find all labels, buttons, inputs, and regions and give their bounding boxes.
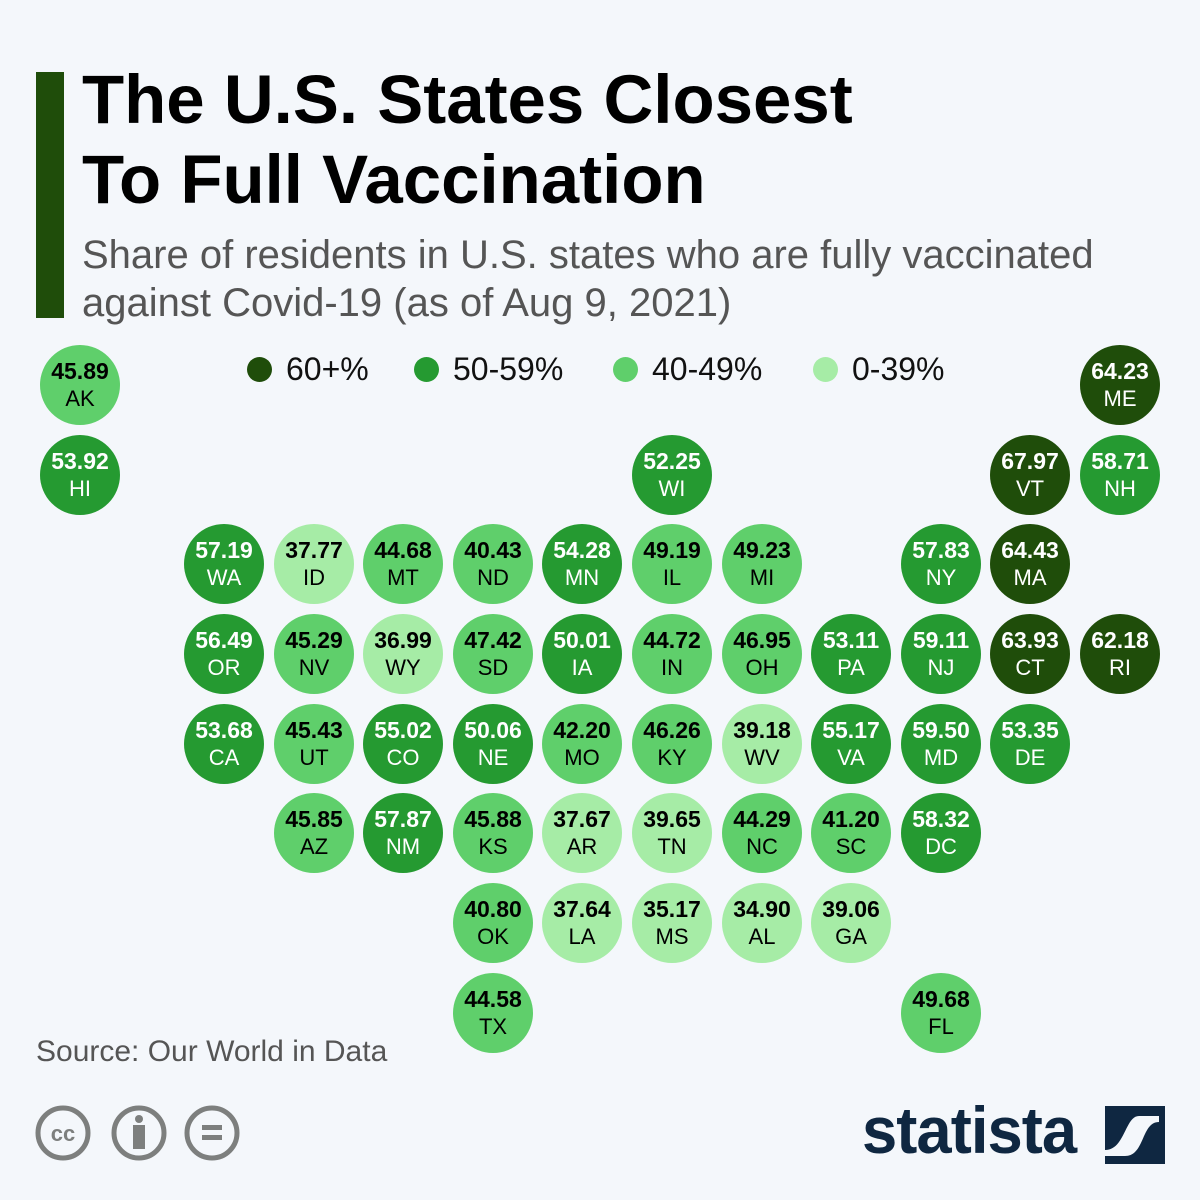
tile map of states: 45.29 bbox=[285, 627, 343, 653]
tile map of states: 59.11 bbox=[913, 627, 969, 653]
tile map of states: 45.88 bbox=[464, 806, 522, 832]
tile map of states: RI bbox=[1109, 655, 1131, 680]
tile map of states: OK bbox=[477, 924, 509, 949]
tile map of states: AL bbox=[749, 924, 775, 949]
tile map of states: 44.29 bbox=[733, 806, 791, 832]
tile map of states: ND bbox=[477, 565, 509, 590]
tile map of states: AK bbox=[65, 386, 95, 411]
tile map of states: NC bbox=[746, 834, 778, 859]
tile map of states: 39.65 bbox=[643, 806, 701, 832]
tile map of states: 37.77 bbox=[285, 537, 343, 563]
tile map of states: WI bbox=[659, 476, 685, 501]
tile map of states: NV bbox=[299, 655, 329, 680]
tile map of states: 58.71 bbox=[1091, 448, 1149, 474]
tile map of states: 67.97 bbox=[1001, 448, 1059, 474]
tile map of states: OR bbox=[208, 655, 240, 680]
tile map of states: 53.92 bbox=[51, 448, 109, 474]
tile map of states: ME bbox=[1104, 386, 1136, 411]
tile map of states: PA bbox=[837, 655, 865, 680]
tile map of states: NJ bbox=[928, 655, 954, 680]
tile map of states: 37.67 bbox=[553, 806, 611, 832]
tile map of states: MS bbox=[656, 924, 688, 949]
license icons bbox=[36, 1106, 240, 1160]
tile map of states: 44.58 bbox=[464, 986, 522, 1012]
tile map of states: MI bbox=[750, 565, 774, 590]
tile map of states: 53.11 bbox=[823, 627, 879, 653]
tile map of states: 63.93 bbox=[1001, 627, 1059, 653]
tile map of states: 55.17 bbox=[822, 717, 880, 743]
tile map of states: 57.83 bbox=[912, 537, 970, 563]
tile map of states: 40.80 bbox=[464, 896, 522, 922]
tile map of states: HI bbox=[69, 476, 91, 501]
tile map of states: MT bbox=[387, 565, 419, 590]
tile map of states: FL bbox=[928, 1014, 954, 1039]
tile map of states: VA bbox=[837, 745, 865, 770]
tile map of states: 49.68 bbox=[912, 986, 970, 1012]
tile map of states: 45.85 bbox=[285, 806, 343, 832]
tile map of states: NM bbox=[386, 834, 420, 859]
tile map of states: 62.18 bbox=[1091, 627, 1149, 653]
legend: 40-49% bbox=[652, 351, 762, 387]
tile map of states bbox=[40, 345, 1160, 1053]
tile map of states: 39.06 bbox=[822, 896, 880, 922]
legend bbox=[247, 351, 944, 387]
tile map of states: 37.64 bbox=[553, 896, 611, 922]
tile map of states: 54.28 bbox=[553, 537, 611, 563]
title accent bar bbox=[36, 72, 64, 318]
tile map of states: TN bbox=[657, 834, 687, 859]
tile map of states: NH bbox=[1104, 476, 1136, 501]
tile map of states: 57.87 bbox=[374, 806, 432, 832]
tile map of states: 64.23 bbox=[1091, 358, 1149, 384]
tile map of states: 55.02 bbox=[374, 717, 432, 743]
tile map of states: MD bbox=[924, 745, 958, 770]
tile map of states: WA bbox=[207, 565, 241, 590]
tile map of states: ID bbox=[303, 565, 325, 590]
tile map of states: 46.26 bbox=[643, 717, 701, 743]
tile map of states: MO bbox=[564, 745, 600, 770]
tile map of states: CO bbox=[386, 745, 420, 770]
tile map of states: CA bbox=[209, 745, 239, 770]
tile map of states: 47.42 bbox=[464, 627, 522, 653]
tile map of states: GA bbox=[835, 924, 867, 949]
subtitle: Share of residents in U.S. states who are fully vaccinated bbox=[82, 233, 1094, 277]
tile map of states: NE bbox=[478, 745, 508, 770]
tile map of states: 52.25 bbox=[643, 448, 701, 474]
tile map of states: IN bbox=[661, 655, 683, 680]
subtitle bbox=[82, 233, 1094, 325]
tile map of states: UT bbox=[299, 745, 329, 770]
tile map of states: WV bbox=[744, 745, 780, 770]
tile map of states: 44.72 bbox=[643, 627, 701, 653]
tile map of states: 44.68 bbox=[374, 537, 432, 563]
title bbox=[82, 61, 853, 218]
tile map of states: 40.43 bbox=[464, 537, 522, 563]
legend: 0-39% bbox=[852, 351, 944, 387]
tile map of states: MN bbox=[565, 565, 599, 590]
tile map of states: 39.18 bbox=[733, 717, 791, 743]
tile map of states: NY bbox=[926, 565, 956, 590]
tile map of states: 53.35 bbox=[1001, 717, 1059, 743]
tile map of states: 36.99 bbox=[374, 627, 432, 653]
tile map of states: IA bbox=[572, 655, 592, 680]
legend: 50-59% bbox=[453, 351, 563, 387]
tile map of states: 58.32 bbox=[912, 806, 970, 832]
tile map of states: WY bbox=[385, 655, 421, 680]
license icons: cc bbox=[51, 1121, 75, 1146]
tile map of states: 42.20 bbox=[553, 717, 611, 743]
tile map of states: 64.43 bbox=[1001, 537, 1059, 563]
tile map of states: LA bbox=[569, 924, 595, 949]
tile map of states: VT bbox=[1016, 476, 1044, 501]
tile map of states: TX bbox=[479, 1014, 507, 1039]
tile map of states: MA bbox=[1014, 565, 1046, 590]
tile map of states: 59.50 bbox=[912, 717, 970, 743]
tile map of states: 49.19 bbox=[643, 537, 701, 563]
tile map of states: CT bbox=[1015, 655, 1045, 680]
tile map of states: IL bbox=[663, 565, 681, 590]
tile map of states: DC bbox=[925, 834, 957, 859]
subtitle: against Covid-19 (as of Aug 9, 2021) bbox=[82, 281, 731, 325]
tile map of states: 34.90 bbox=[733, 896, 791, 922]
tile map of states: KS bbox=[478, 834, 508, 859]
tile map of states: AR bbox=[567, 834, 597, 859]
tile map of states: 35.17 bbox=[643, 896, 701, 922]
tile map of states: SD bbox=[478, 655, 508, 680]
title: The U.S. States Closest bbox=[82, 61, 853, 138]
legend: 60+% bbox=[286, 351, 369, 387]
tile map of states: AZ bbox=[300, 834, 328, 859]
tile map of states: 45.43 bbox=[285, 717, 343, 743]
statista logo: statista bbox=[862, 1093, 1076, 1167]
tile map of states: 57.19 bbox=[195, 537, 253, 563]
tile map of states: DE bbox=[1015, 745, 1045, 770]
tile map of states: SC bbox=[836, 834, 866, 859]
source: Source: Our World in Data bbox=[36, 1035, 387, 1068]
tile map of states: OH bbox=[746, 655, 778, 680]
tile map of states: 45.89 bbox=[51, 358, 109, 384]
tile map of states: 56.49 bbox=[195, 627, 253, 653]
title: To Full Vaccination bbox=[82, 141, 706, 218]
tile map of states: KY bbox=[657, 745, 687, 770]
tile map of states: 49.23 bbox=[733, 537, 791, 563]
tile map of states: 41.20 bbox=[822, 806, 880, 832]
tile map of states: 46.95 bbox=[733, 627, 791, 653]
tile map of states: 53.68 bbox=[195, 717, 253, 743]
tile map of states: 50.06 bbox=[464, 717, 522, 743]
tile map of states: 50.01 bbox=[553, 627, 611, 653]
